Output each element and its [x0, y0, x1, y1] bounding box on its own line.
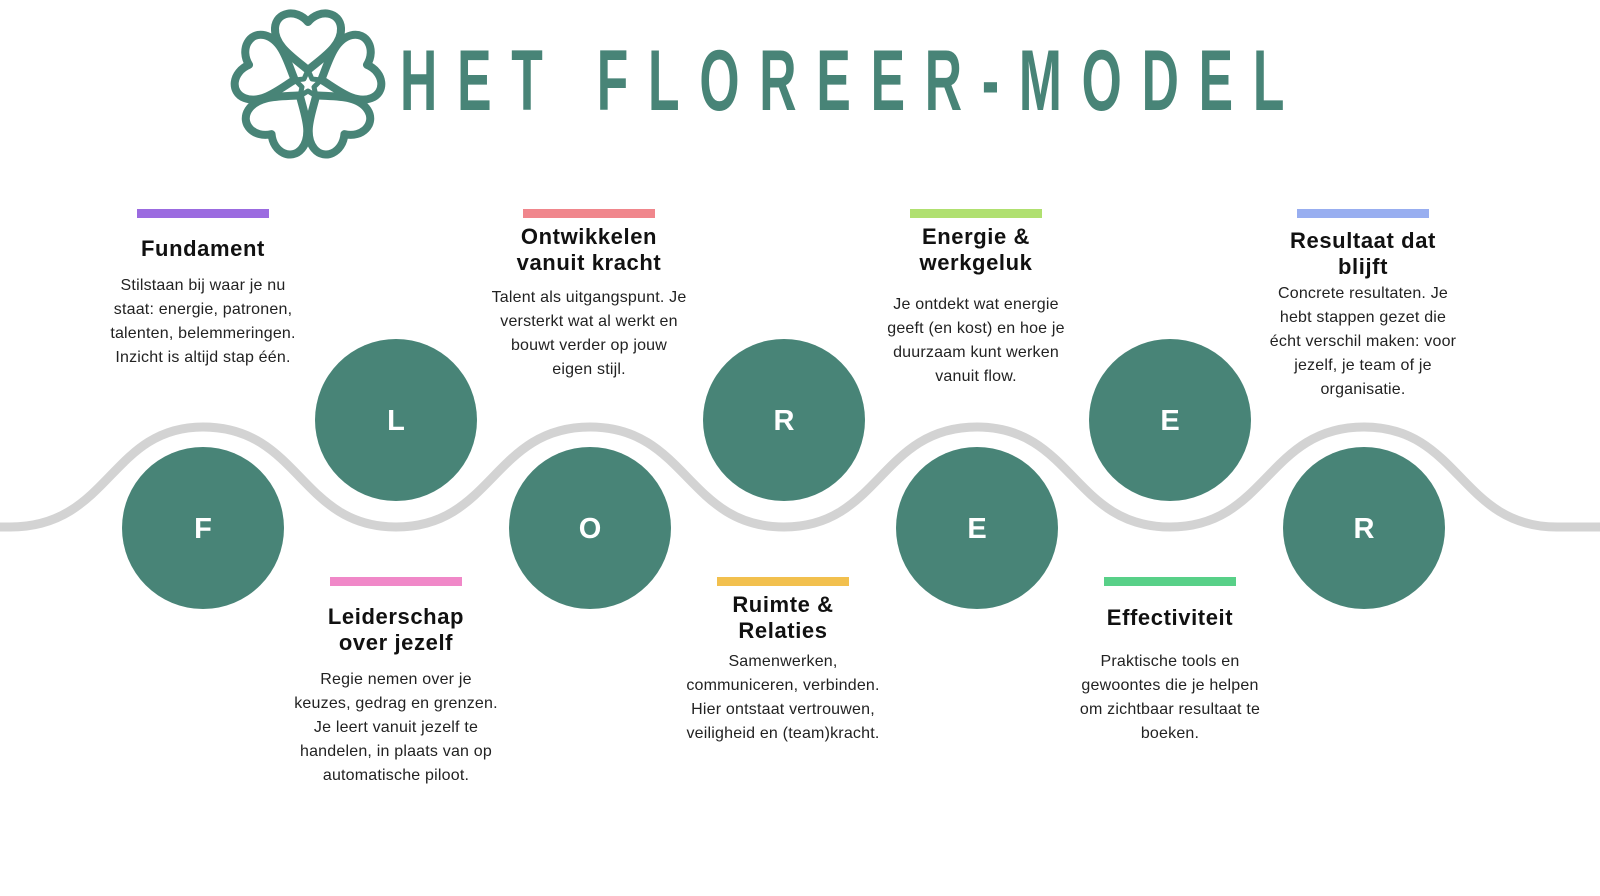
- panel: Ruimte: Relaties: [738, 618, 828, 643]
- panel: Leiderschap: Regie nemen over je: [320, 671, 472, 688]
- panel: Ruimte: communiceren, verbinden.: [686, 677, 880, 694]
- circle E: E: [967, 513, 987, 545]
- panel: Leiderschap: keuzes, gedrag en grenzen.: [294, 695, 498, 712]
- panel: Energie: werkgeluk: [919, 250, 1032, 275]
- panel: Resultaat: [1270, 209, 1456, 398]
- panel: Effectiviteit: Praktische tools en: [1100, 653, 1239, 670]
- panel: Resultaat: Concrete resultaten. Je: [1278, 285, 1448, 302]
- panel: Ontwikkelen: eigen stijl.: [552, 361, 626, 378]
- circle L: [315, 339, 477, 501]
- panel: Fundament: Fundament: [141, 236, 265, 261]
- circle R: R: [774, 405, 795, 437]
- panel: Resultaat: Resultaat dat: [1290, 228, 1436, 253]
- panel: Leiderschap: automatische piloot.: [323, 767, 469, 784]
- panel: Energie: vanuit flow.: [935, 368, 1017, 385]
- panel: Ontwikkelen: [492, 209, 686, 378]
- panel: Resultaat: blijft: [1338, 254, 1388, 279]
- panel: Fundament: [110, 209, 296, 366]
- circle L: L: [387, 405, 405, 437]
- panel: Ruimte: veiligheid en (team)kracht.: [686, 725, 880, 742]
- panel: Effectiviteit: om zichtbaar resultaat te: [1080, 701, 1260, 718]
- circle R2: [1283, 447, 1445, 609]
- panel: Energie: Energie &: [922, 224, 1030, 249]
- panel: Ruimte: Ruimte &: [732, 592, 834, 617]
- panel: Ontwikkelen: vanuit kracht: [517, 250, 661, 275]
- panel: Ontwikkelen: Talent als uitgangspunt. Je: [492, 289, 686, 306]
- panel: Effectiviteit: gewoontes die je helpen: [1081, 677, 1259, 694]
- panel: Energie: duurzaam kunt werken: [893, 344, 1059, 361]
- circle E2: E: [1160, 405, 1180, 437]
- panel: Ontwikkelen: Ontwikkelen: [521, 224, 657, 249]
- panel: Energie: [887, 209, 1065, 385]
- circle F: F: [194, 513, 212, 545]
- panel: Fundament: Stilstaan bij waar je nu: [121, 277, 285, 294]
- circle E: [896, 447, 1058, 609]
- panel: Ruimte: [686, 577, 880, 742]
- panel: Resultaat: écht verschil maken: voor: [1270, 333, 1456, 350]
- panel: Effectiviteit: boeken.: [1141, 725, 1199, 742]
- panel: Effectiviteit: Effectiviteit: [1107, 605, 1233, 630]
- logo: clover: [230, 9, 386, 158]
- panel: Energie: Je ontdekt wat energie: [893, 296, 1059, 313]
- panel: Energie: geeft (en kost) en hoe je: [887, 320, 1065, 337]
- panel: Resultaat: hebt stappen gezet die: [1280, 309, 1446, 326]
- panel: Effectiviteit: [1080, 577, 1260, 742]
- circle O: O: [579, 513, 601, 545]
- panel: Resultaat: jezelf, je team of je: [1294, 357, 1432, 374]
- panel: Resultaat: organisatie.: [1320, 381, 1406, 398]
- title: HET FLOREER-MODEL: [400, 33, 1304, 129]
- circle O: [509, 447, 671, 609]
- circle R2: R: [1354, 513, 1375, 545]
- panel: Leiderschap: over jezelf: [339, 630, 453, 655]
- panel: Ruimte: Samenwerken,: [728, 653, 838, 670]
- panel: Fundament: staat: energie, patronen,: [114, 301, 292, 318]
- circle E2: [1089, 339, 1251, 501]
- panel: Fundament: Inzicht is altijd stap één.: [115, 349, 291, 366]
- panel: Leiderschap: Leiderschap: [328, 604, 464, 629]
- panel: Fundament: talenten, belemmeringen.: [110, 325, 296, 342]
- circle R: [703, 339, 865, 501]
- panel: Leiderschap: [294, 577, 498, 784]
- panel: Ontwikkelen: bouwt verder op jouw: [511, 337, 667, 354]
- circle F: [122, 447, 284, 609]
- panel: Leiderschap: Je leert vanuit jezelf te: [314, 719, 478, 736]
- panel: Ruimte: Hier ontstaat vertrouwen,: [691, 701, 875, 718]
- panel: Ontwikkelen: versterkt wat al werkt en: [500, 313, 678, 330]
- panel: Leiderschap: handelen, in plaats van op: [300, 743, 492, 760]
